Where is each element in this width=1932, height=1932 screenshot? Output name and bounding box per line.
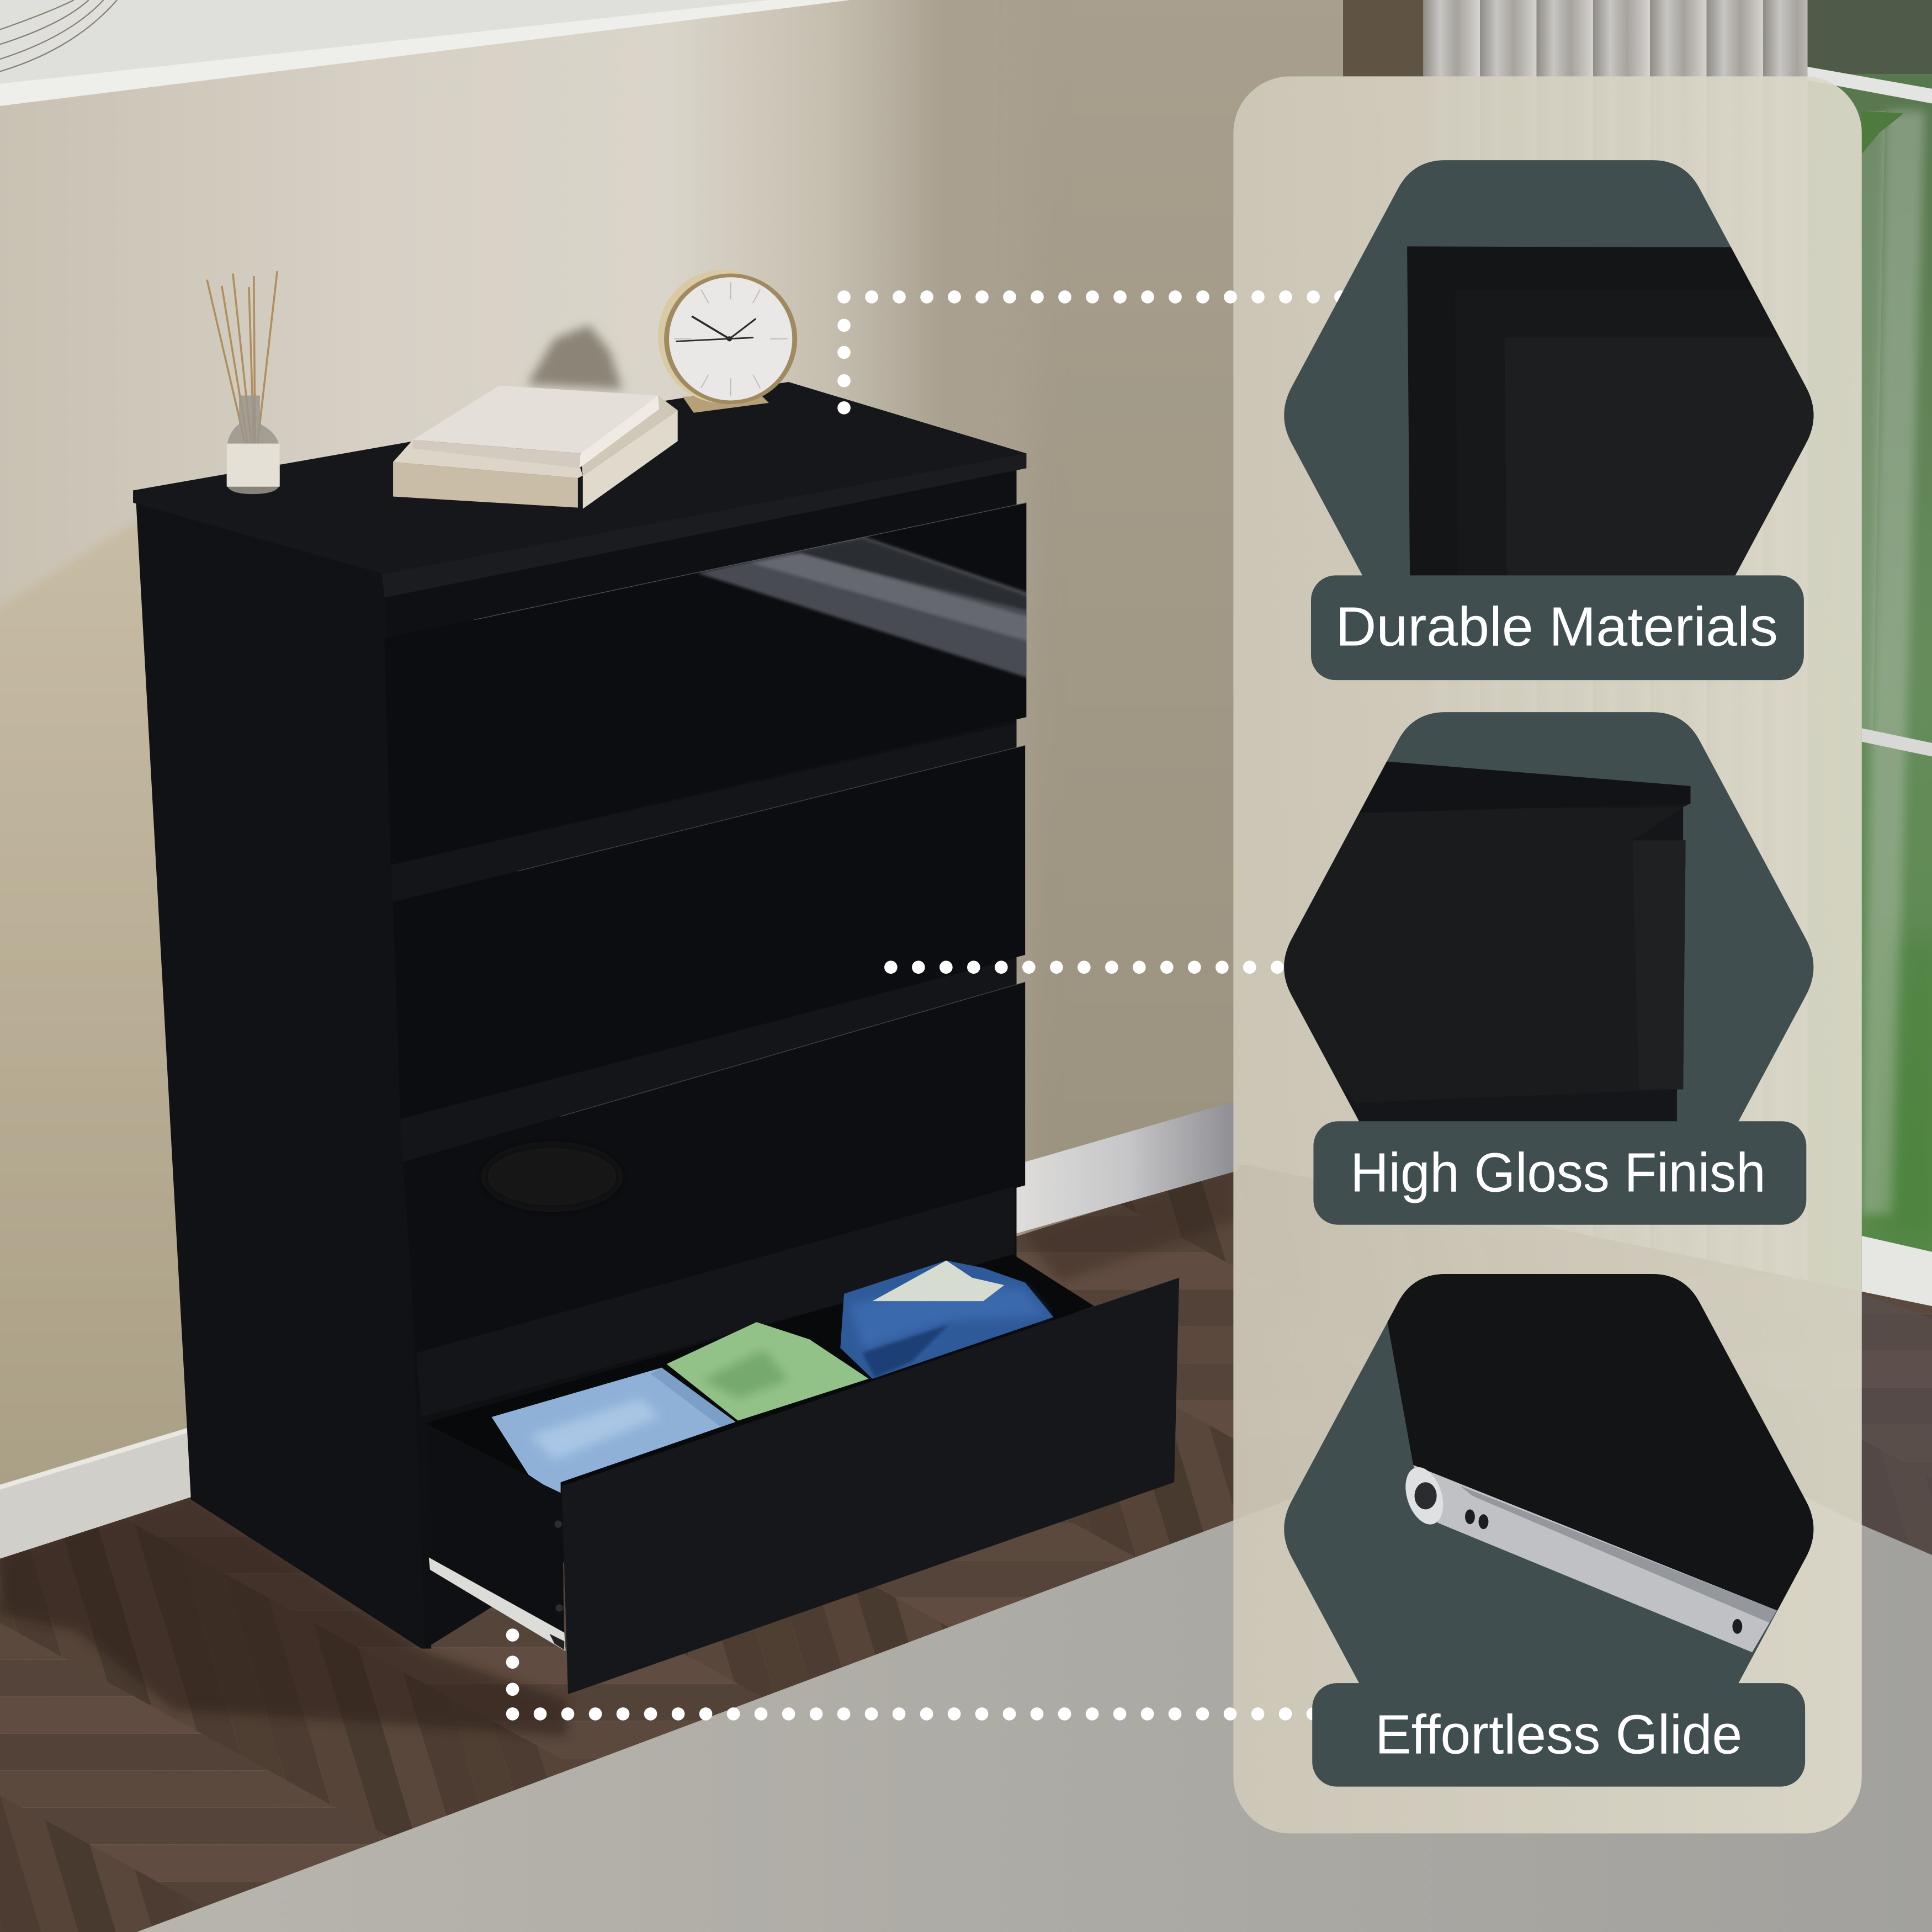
clothes: white shirt [872, 1260, 1004, 1301]
drawer screws [554, 1520, 563, 1612]
label: high gloss finish: High Gloss Finish [1350, 1142, 1766, 1203]
drawer rail [400, 959, 1017, 1162]
label: high gloss finish [1313, 1121, 1806, 1225]
open drawer [416, 1187, 1179, 1694]
label: durable materials [1311, 575, 1804, 680]
hexagon: durable materials [1284, 160, 1814, 575]
clock ticks [674, 282, 787, 396]
wooden floor [0, 1164, 1932, 1932]
glossy drawer closeup [1281, 761, 1690, 1134]
drawer interior [425, 1254, 1094, 1493]
clock rim [664, 274, 797, 404]
reeds [207, 271, 277, 444]
wall [0, 0, 1479, 1602]
rug [137, 1389, 1932, 1932]
clothes: denim [492, 1368, 736, 1496]
window and garden [1805, 0, 1932, 1331]
dotted connector: glide [506, 1628, 1319, 1721]
upper book [413, 386, 658, 453]
drawer rail [391, 723, 1017, 902]
dotted connector: materials [837, 290, 1347, 415]
reed diffuser [207, 271, 280, 494]
dotted connector: gloss [884, 960, 1284, 974]
wall shadow behind clock [527, 325, 622, 389]
feature panel [1233, 76, 1862, 1833]
drawer runner closeup [1355, 1232, 1848, 1652]
drawer one [474, 502, 1027, 720]
drawer two [393, 745, 1025, 1119]
hexagon: effortless glide [1284, 1274, 1814, 1684]
books [393, 386, 678, 509]
drawer runner [429, 1557, 566, 1651]
bottle label [227, 444, 280, 487]
carcass front [384, 462, 1017, 1649]
top surface [133, 382, 1026, 574]
clock hands [676, 317, 755, 341]
lower book [393, 462, 578, 508]
drawer front [562, 1278, 1179, 1694]
clothes: blue hoodie [840, 1260, 1053, 1379]
rail below drawer three [416, 1187, 1014, 1417]
clock face [669, 277, 792, 400]
clock body [658, 270, 786, 403]
wall art frame [0, 0, 850, 106]
clothes: green top [667, 1322, 869, 1421]
reflection [697, 536, 1035, 680]
book filler [580, 396, 678, 476]
clock base [683, 394, 769, 413]
label: effortless glide [1312, 1683, 1805, 1787]
side panel [136, 493, 431, 1649]
hexagon: high gloss finish [1284, 712, 1814, 1122]
curtain [1423, 0, 1808, 1281]
drawer side [428, 1429, 564, 1645]
chest of drawers [133, 325, 1179, 1694]
skirting board [0, 1100, 1238, 1559]
bottle [227, 396, 280, 494]
layered board closeup [1407, 246, 1814, 575]
drawer three [403, 982, 1025, 1353]
label: effortless glide: Effortless Glide [1375, 1703, 1742, 1765]
label: durable materials: Durable Materials [1336, 596, 1778, 658]
top front edge [382, 453, 1026, 598]
clock [658, 270, 797, 413]
